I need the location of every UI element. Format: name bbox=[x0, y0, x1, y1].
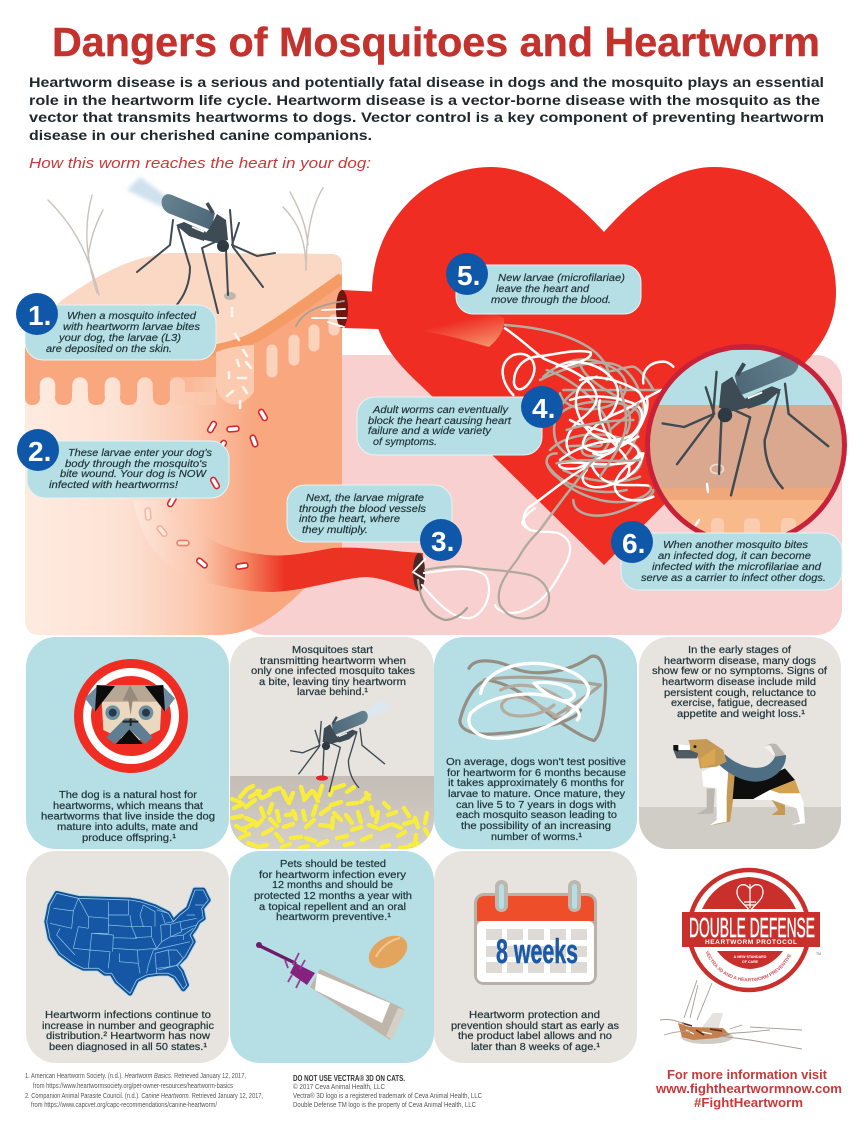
panel: natural host: produce offspring.¹ bbox=[82, 833, 177, 844]
step 4 callout: block the heart causing heart bbox=[368, 416, 512, 427]
panel: testing and prevention: Pets should be tested bbox=[280, 859, 386, 870]
intro paragraph: role in the heartworm life cycle. Heartworm disease is a vector-borne disease with the mosquito as the bbox=[29, 92, 820, 108]
panel: symptoms: show few or no symptoms. Signs of bbox=[652, 666, 827, 677]
call to action: www.fightheartwormnow.com bbox=[655, 1082, 842, 1096]
intro paragraph: disease in our cherished canine companions. bbox=[29, 127, 372, 143]
worms from upper vessel bbox=[296, 301, 346, 327]
intro paragraph: vector that transmits heartworms to dogs. Vector control is a key component of preventing heartworm bbox=[29, 109, 824, 125]
step 5 callout: 5. bbox=[457, 260, 480, 291]
panel: transmission bbox=[230, 637, 434, 856]
step 2 callout: infected with heartworms! bbox=[49, 480, 178, 491]
panel: geographic spread: increase in number and geographic bbox=[42, 1021, 214, 1032]
call to action bbox=[655, 1068, 842, 1110]
step 3 callout bbox=[287, 485, 462, 561]
panel: natural host: heartworms that live inside the dog bbox=[41, 812, 215, 822]
panel: natural host: The dog is a natural host for bbox=[59, 790, 198, 801]
panel: start early: Heartworm protection and bbox=[469, 1010, 600, 1021]
step 1 callout: 1. bbox=[28, 300, 51, 331]
step 4 callout: failure and a wide variety bbox=[368, 426, 492, 437]
panel: symptoms: heartworm disease include mild bbox=[662, 677, 816, 688]
panel: symptoms: In the early stages of bbox=[688, 645, 791, 656]
vessel opening lower bbox=[413, 553, 426, 591]
legal text: Vectra® 3D logo is a registered trademark of Ceva Animal Health, LLC bbox=[293, 1092, 482, 1100]
illustration: dead mosquito bbox=[660, 980, 802, 1049]
logo: Double Defense: OF CARE bbox=[742, 960, 759, 964]
panel: transmission: a bite, leaving tiny heartworm bbox=[259, 677, 406, 688]
step 3 callout: into the heart, where bbox=[299, 514, 400, 525]
panel: start early bbox=[434, 851, 637, 1063]
icon: pug in target bbox=[74, 659, 188, 773]
footnote references bbox=[25, 1073, 263, 1109]
step 1 callout: When a mosquito infected bbox=[67, 311, 196, 322]
panel: geographic spread: Heartworm infections continue to bbox=[45, 1010, 211, 1021]
mosquito bbox=[291, 699, 391, 792]
step 3 callout: they multiply. bbox=[302, 525, 368, 536]
step 2 callout bbox=[17, 429, 229, 498]
icon: calendar: 8 weeks bbox=[496, 933, 578, 971]
step 4 callout: 4. bbox=[532, 393, 555, 424]
icon: USA map bbox=[47, 890, 208, 993]
icon: worm tangle bbox=[460, 656, 606, 741]
panel: testing timeline: the possibility of an increasing bbox=[461, 821, 611, 832]
pink background panel bbox=[240, 355, 842, 635]
footnote references: 2. Companion Animal Parasite Council. (n.d.). Canine Heartworm. Retrieved January 12, 2017, bbox=[25, 1093, 263, 1100]
panel: natural host: mature into adults, mate and bbox=[57, 822, 198, 833]
icon: calendar bbox=[474, 880, 597, 985]
panel: testing timeline: can live 5 to 7 years in dogs with bbox=[456, 800, 616, 811]
logo: Double Defense: HEARTWORM PROTOCOL bbox=[705, 939, 797, 946]
step 4 callout: Adult worms can eventually bbox=[372, 405, 509, 416]
inset mosquito bbox=[663, 353, 828, 495]
step 3 callout: 3. bbox=[431, 526, 454, 557]
legal text bbox=[293, 1074, 482, 1109]
call to action: #FightHeartworm bbox=[694, 1096, 803, 1110]
title: Dangers of Mosquitoes and Heartworm bbox=[52, 19, 820, 65]
panel: symptoms: persistent cough, reluctance to bbox=[664, 688, 816, 699]
inset circle bbox=[645, 344, 847, 532]
step 6 callout: an infected dog, it can become bbox=[658, 551, 811, 562]
panel: geographic spread bbox=[26, 851, 229, 1063]
panel: start early: the product label allows and no bbox=[458, 1031, 612, 1042]
icon: topical tube bbox=[256, 942, 405, 1040]
intro paragraph: Heartworm disease is a serious and potentially fatal disease in dogs and the mosquito plays an essential bbox=[29, 74, 824, 90]
panel: geographic spread: been diagnosed in all 50 states.¹ bbox=[49, 1042, 208, 1053]
subheading: How this worm reaches the heart in your dog: bbox=[29, 156, 371, 172]
panel: symptoms: heartworm disease, many dogs bbox=[664, 656, 816, 667]
panel: start early: later than 8 weeks of age.¹ bbox=[471, 1042, 601, 1053]
panel: symptoms: appetite and weight loss.¹ bbox=[677, 709, 806, 720]
panel: natural host: heartworms, which means that bbox=[53, 801, 203, 812]
panel: testing timeline: larvae to mature. Once mature, they bbox=[448, 789, 625, 800]
panel: transmission: transmitting heartworm when bbox=[260, 656, 406, 667]
step 2 callout: These larvae enter your dog's bbox=[68, 448, 212, 459]
legal text: Double Defense TM logo is the property of Ceva Animal Health, LLC bbox=[293, 1102, 476, 1109]
worm tails bbox=[418, 508, 570, 620]
step 3 callout: through the blood vessels bbox=[299, 504, 426, 515]
skin cross-section bbox=[25, 250, 342, 640]
step 6 callout: When another mosquito bites bbox=[663, 540, 808, 551]
step 6 callout: 6. bbox=[622, 528, 645, 559]
footnote references: from https://www.heartwormsociety.org/pet-owner-resources/heartworm-basics bbox=[33, 1083, 233, 1090]
panel: symptoms: exercise, fatigue, decreased bbox=[671, 698, 807, 709]
panel: testing and prevention: for heartworm infection every bbox=[259, 870, 406, 881]
larvae in vessel bbox=[145, 508, 248, 569]
panel: testing timeline bbox=[434, 637, 637, 849]
vessel opening upper bbox=[336, 290, 348, 328]
panel: testing timeline: each mosquito season leading to bbox=[456, 810, 617, 821]
panel: geographic spread: distribution.² Heartworm has now bbox=[46, 1031, 211, 1042]
worm tangle bbox=[503, 325, 673, 530]
step 5 callout bbox=[446, 253, 641, 314]
panel: life cycle illustration bbox=[25, 167, 850, 640]
panel: testing and prevention: protected 12 months a year with bbox=[254, 891, 412, 902]
step 1 callout bbox=[16, 293, 216, 360]
legal text: © 2017 Ceva Animal Health, LLC bbox=[293, 1083, 385, 1091]
hairs bbox=[48, 188, 323, 295]
panel: transmission: Mosquitoes start bbox=[292, 645, 373, 656]
main mosquito bbox=[127, 177, 275, 313]
panel: symptoms bbox=[639, 637, 841, 852]
icon: pill bbox=[363, 929, 413, 975]
step 4 callout: of symptoms. bbox=[373, 437, 437, 448]
heart bbox=[372, 167, 836, 565]
step 4 callout bbox=[357, 386, 563, 455]
panel: testing timeline: it takes approximately 6 months for bbox=[448, 778, 625, 789]
step 1 callout: with heartworm larvae bites bbox=[63, 322, 200, 333]
footnote references: 1. American Heartworm Society. (n.d.). Heartworm Basics. Retrieved January 12, 2017, bbox=[25, 1073, 246, 1080]
logo: Double Defense: TM bbox=[816, 952, 821, 956]
panel: testing and prevention: heartworm preventive.¹ bbox=[276, 912, 392, 923]
legal text: DO NOT USE VECTRA® 3D ON CATS. bbox=[293, 1074, 405, 1083]
panel: transmission: larvae behind.¹ bbox=[297, 687, 369, 698]
logo: Double Defense: VECTRA 3D AND A HEARTWORM PREVENTIVE bbox=[706, 950, 792, 982]
call to action: For more information visit bbox=[667, 1068, 828, 1082]
panel: testing timeline: On average, dogs won't test positive bbox=[446, 757, 626, 768]
step 6 callout: infected with the microfilariae and bbox=[652, 562, 821, 573]
bite mark bbox=[224, 292, 236, 300]
step 2 callout: 2. bbox=[28, 436, 51, 467]
step 1 callout: your dog, the larvae (L3) bbox=[58, 333, 181, 344]
step 5 callout: move through the blood. bbox=[491, 295, 611, 306]
panel: transmission: only one infected mosquito takes bbox=[251, 666, 415, 677]
intro paragraph bbox=[29, 74, 824, 143]
step 1 callout: are deposited on the skin. bbox=[46, 344, 172, 355]
panel: testing and prevention: a topical repellent and an oral bbox=[259, 902, 406, 913]
step 6 callout bbox=[611, 521, 842, 590]
step 2 callout: bite wound. Your dog is NOW bbox=[60, 469, 208, 480]
panel: natural host bbox=[26, 637, 229, 849]
vessel lower bbox=[133, 500, 423, 592]
panel: testing timeline: for heartworm for 6 months because bbox=[447, 768, 626, 779]
larvae on the skin bbox=[227, 308, 251, 408]
vessel upper bbox=[342, 290, 504, 347]
panel: testing timeline: number of worms.¹ bbox=[491, 832, 583, 843]
panel: start early: prevention should start as early as bbox=[451, 1021, 619, 1032]
red larvae bbox=[167, 409, 268, 507]
icon: beagle bbox=[673, 739, 805, 825]
step 3 callout: Next, the larvae migrate bbox=[306, 493, 424, 504]
step 5 callout: New larvae (microfilariae) bbox=[498, 273, 625, 284]
panel: testing and prevention bbox=[230, 851, 434, 1063]
step 2 callout: body through the mosquito's bbox=[65, 459, 207, 470]
footnote references: from https://www.capcvet.org/capc-recommendations/canine-heartworm/ bbox=[31, 1102, 217, 1109]
step 6 callout: serve as a carrier to infect other dogs. bbox=[641, 573, 826, 584]
yellow larvae pile bbox=[232, 785, 430, 848]
step 5 callout: leave the heart and bbox=[496, 284, 589, 295]
panel: testing and prevention: 12 months and should be bbox=[272, 880, 393, 891]
logo: Double Defense: A NEW STANDARD bbox=[734, 955, 767, 959]
logo: Double Defense bbox=[682, 868, 821, 992]
